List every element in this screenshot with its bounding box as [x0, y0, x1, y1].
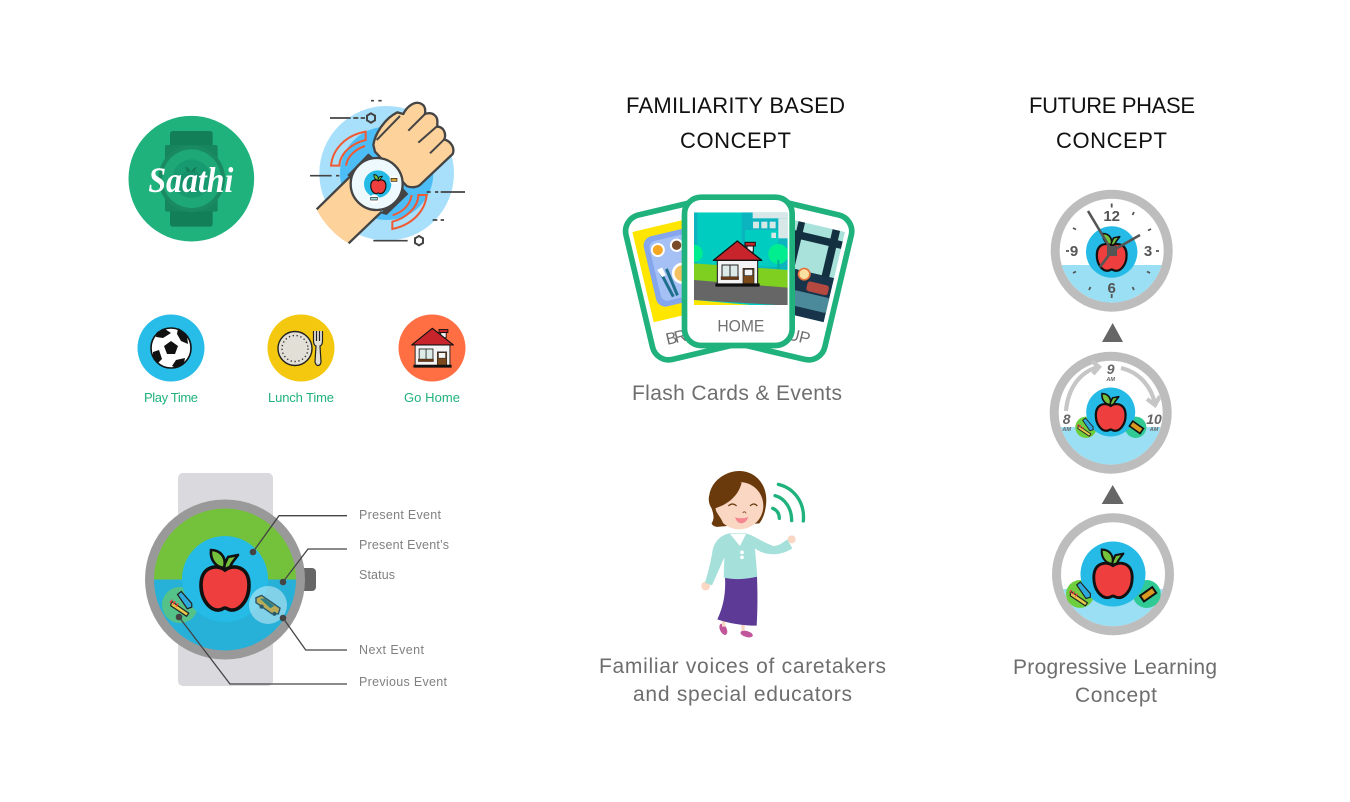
heading: Future Phase Concept: FUTURE PHASE [1029, 93, 1195, 118]
label: Go Home: Go Home [404, 390, 460, 405]
watch: schedule arc concept: AM [1105, 377, 1115, 383]
label: Play Time: Play Time [144, 390, 198, 405]
icon: Go Home [398, 314, 466, 382]
label: Next Event: Next Event [359, 643, 425, 657]
watch: clock concept: 9 [1070, 243, 1078, 260]
heading: Familiarity Based Concept [626, 93, 845, 153]
heading: Future Phase Concept: CONCEPT [1056, 128, 1167, 153]
caption: Familiar voices: Familiar voices of caretakers [599, 655, 886, 678]
heading: Future Phase Concept [1029, 93, 1195, 153]
watch: schedule arc concept: AM [1061, 427, 1071, 433]
watch: progressive learning [1056, 518, 1170, 639]
card: breakfast: BREAKFAST [664, 313, 744, 349]
arrow: up [1102, 323, 1123, 342]
watch: schedule arc concept: AM [1149, 427, 1159, 433]
caption: Progressive Learning Concept: Concept [1075, 684, 1157, 707]
arrow: up [1102, 485, 1124, 504]
card: home: HOME [717, 317, 764, 336]
watch: schedule arc concept [1054, 356, 1168, 477]
watch: clock concept: 12 [1103, 208, 1120, 225]
watch: schedule arc concept: 10 [1146, 411, 1162, 427]
flash cards [622, 194, 855, 363]
caption: Familiar voices: and special educators [633, 683, 852, 706]
label: Previous Event: Previous Event [359, 675, 448, 689]
caption: Progressive Learning Concept: Progressive Learning [1013, 656, 1217, 679]
label: Lunch Time: Lunch Time [268, 390, 334, 405]
label: Present Event's Status: Status [359, 568, 395, 582]
leader lines [179, 516, 347, 684]
watch: clock concept [1055, 194, 1169, 315]
card: wake up [745, 200, 855, 363]
caption: Flash Cards & Events: Flash Cards & Events [632, 382, 842, 405]
watch face [145, 500, 305, 660]
icon: Saathi logo [128, 116, 254, 241]
illustration: woman speaking [701, 471, 804, 639]
watch: clock concept: 6 [1108, 280, 1116, 297]
watch: schedule arc concept: 9 [1107, 361, 1115, 377]
icon: Play Time [138, 314, 204, 382]
card: home [684, 197, 792, 345]
icon: wrist with smartwatch [310, 101, 465, 245]
heading: Familiarity Based Concept: CONCEPT [680, 128, 791, 153]
watch: clock concept: 3 [1144, 243, 1152, 260]
card: wake up: WAKE UP [735, 312, 812, 348]
watch crown [300, 568, 316, 591]
icon: Lunch Time [268, 314, 334, 382]
progress arrows [1066, 361, 1160, 411]
watch: schedule arc concept: 8 [1063, 411, 1071, 427]
heading: Familiarity Based Concept: FAMILIARITY BASED [626, 93, 845, 118]
label: Present Event's Status [359, 538, 449, 582]
annotated watch diagram [145, 473, 347, 686]
caption: Progressive Learning Concept [1013, 656, 1217, 707]
card: breakfast [622, 200, 732, 363]
caption: Familiar voices [599, 655, 886, 706]
logo wordmark: Saathi [148, 160, 233, 200]
watch strap [178, 473, 273, 686]
label: Present Event: Present Event [359, 508, 442, 522]
label: Present Event's Status: Present Event’s [359, 538, 449, 552]
